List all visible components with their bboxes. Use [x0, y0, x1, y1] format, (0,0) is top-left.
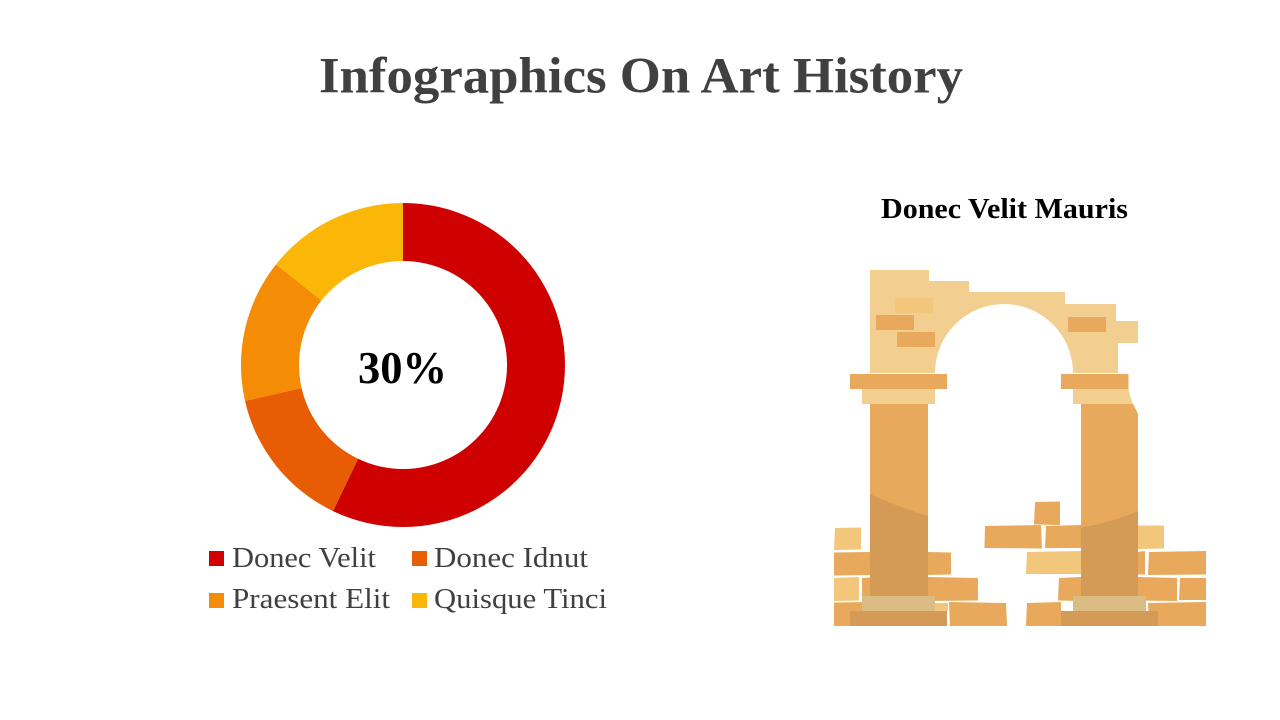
legend label: Donec Velit: Donec Velit: [232, 543, 376, 574]
illustration heading: Donec Velit Mauris: [881, 194, 1128, 225]
legend swatch: Donec Velit: [209, 551, 224, 566]
right plinth: [1073, 596, 1146, 611]
light bricks: [834, 526, 1164, 611]
legend label: Praesent Elit: Praesent Elit: [232, 584, 390, 615]
right shaft shadow: [1081, 511, 1138, 596]
right capital base: [1073, 389, 1133, 404]
legend label: Quisque Tinci: Quisque Tinci: [434, 584, 607, 615]
right foot: [1061, 611, 1158, 626]
left shaft shadow: [870, 494, 928, 596]
legend swatch: Donec Idnut: [412, 551, 427, 566]
segment: Praesent Elit: [241, 264, 322, 401]
title: Infographics On Art History: [319, 48, 963, 104]
wall bricks: [876, 298, 1106, 347]
left shaft: [870, 404, 928, 596]
legend: [209, 543, 607, 615]
left foot: [850, 611, 947, 626]
legend label: Donec Idnut: Donec Idnut: [434, 543, 588, 574]
brick rubble: [834, 502, 1206, 626]
legend swatch: Praesent Elit: [209, 593, 224, 608]
right column: [1061, 374, 1158, 626]
segment: Donec Idnut: [245, 388, 358, 511]
arch upper wall: [870, 270, 1138, 373]
donut center value: 30%: [358, 342, 447, 393]
left column: [850, 374, 947, 626]
illustration: ruined roman arch: [834, 270, 1206, 626]
left capital: [850, 374, 947, 389]
left capital base: [862, 389, 935, 404]
legend swatch: Quisque Tinci: [412, 593, 427, 608]
panel: donut chart with legend: [209, 203, 607, 615]
segment: Quisque Tinci: [276, 203, 403, 300]
segment: Donec Velit: [333, 203, 565, 527]
right shaft: [1081, 404, 1138, 596]
left plinth: [862, 596, 935, 611]
donut chart: [241, 203, 565, 527]
right capital: [1061, 374, 1128, 389]
